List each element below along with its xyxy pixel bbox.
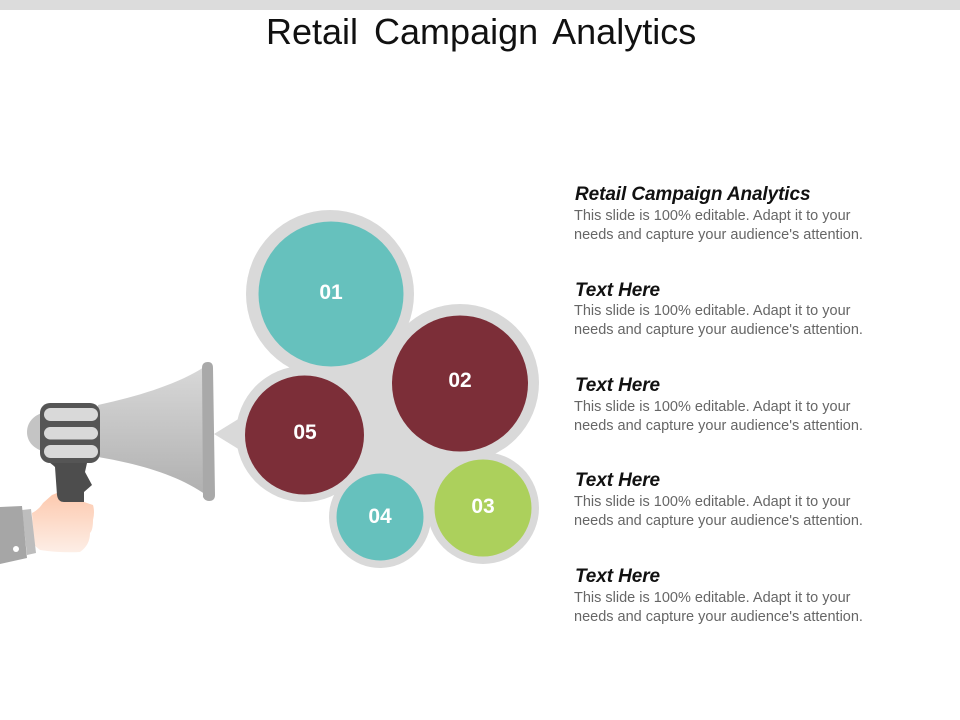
circle 03 — [434, 460, 532, 556]
text block 2: This slide is 100% editable. Adapt it to your — [574, 303, 850, 319]
circle 03: 03 — [471, 495, 495, 518]
text block 1: Retail Campaign Analytics — [575, 184, 810, 205]
circle 05 — [245, 376, 364, 494]
text block 4: Text Here — [575, 470, 660, 491]
text block 3: needs and capture your audience's attention. — [574, 418, 863, 434]
circle 04: 04 — [368, 505, 392, 528]
top bar — [0, 0, 960, 10]
megaphone cone — [98, 367, 206, 495]
handle grip — [43, 458, 97, 502]
cuff button — [13, 546, 19, 552]
text block 5 — [574, 566, 863, 624]
text block 3: This slide is 100% editable. Adapt it to your — [574, 399, 850, 415]
handle slots — [44, 408, 98, 458]
cuff — [22, 509, 36, 555]
icon: megaphone in hand — [0, 362, 215, 564]
text block 1: This slide is 100% editable. Adapt it to your — [574, 208, 850, 224]
megaphone rim — [202, 362, 215, 501]
text block 2 — [574, 280, 863, 338]
circle 02: 02 — [448, 369, 472, 392]
text block 5: This slide is 100% editable. Adapt it to your — [574, 590, 850, 606]
text block 5: Text Here — [575, 566, 660, 587]
text block 5: needs and capture your audience's attention. — [574, 608, 863, 624]
text block 3: Text Here — [575, 375, 660, 396]
text block 2: Text Here — [575, 280, 660, 301]
title: Retail Campaign Analytics — [266, 11, 696, 52]
circle 02 — [392, 316, 528, 452]
text block 4: This slide is 100% editable. Adapt it to your — [574, 494, 850, 510]
speech bubble diagram — [214, 210, 539, 568]
text block 4: needs and capture your audience's attention. — [574, 512, 863, 528]
text block 1 — [574, 184, 863, 242]
text block 4 — [574, 470, 863, 528]
hand — [32, 493, 94, 552]
megaphone rear dome — [27, 412, 45, 452]
circle 04 — [336, 474, 424, 560]
text block 1: needs and capture your audience's attention. — [574, 226, 863, 242]
sleeve — [0, 506, 27, 564]
bubble background — [214, 210, 539, 568]
handle block — [40, 403, 100, 463]
circle 05: 05 — [293, 421, 317, 444]
text block 2: needs and capture your audience's attention. — [574, 322, 863, 338]
text block 3 — [574, 375, 863, 434]
circle 01 — [258, 222, 404, 366]
circle 01: 01 — [319, 281, 343, 304]
